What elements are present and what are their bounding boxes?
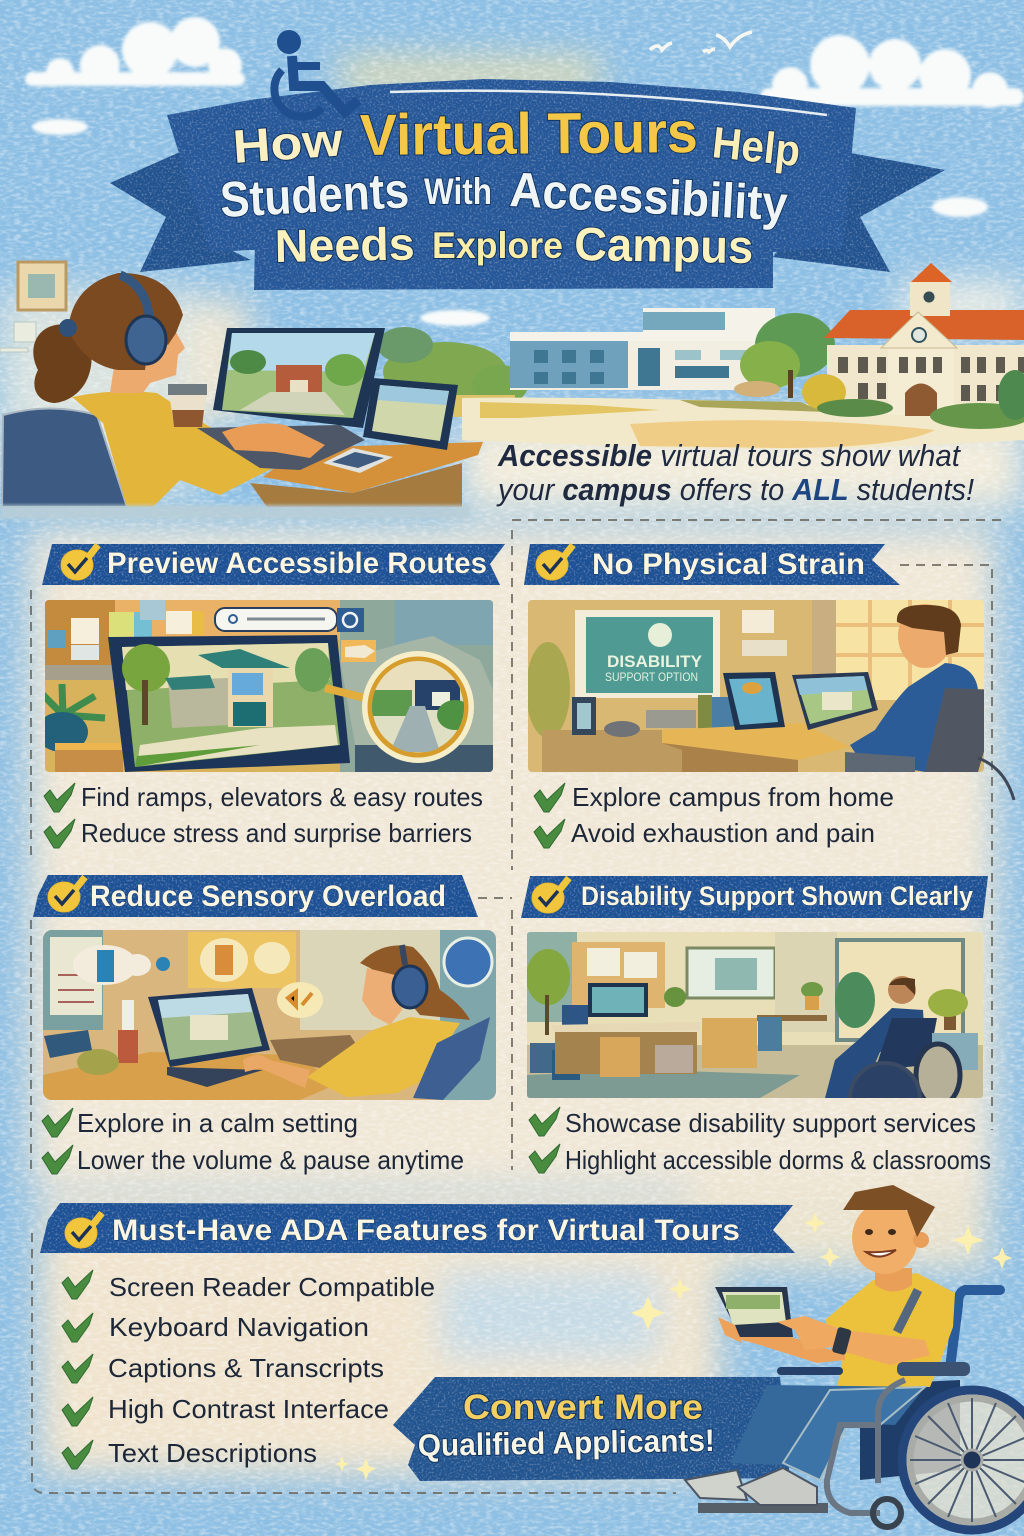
- shoes: [685, 1470, 747, 1500]
- title text: Accessibility: [508, 163, 789, 232]
- feature list: Text Descriptions: [108, 1438, 317, 1468]
- heading: [42, 544, 505, 585]
- title text: Students: [219, 162, 410, 228]
- panel: preview accessible routes: [36, 544, 505, 848]
- title text: How: [231, 112, 345, 173]
- magnifier: [325, 688, 365, 698]
- bullets: Explore in a calm setting: [77, 1108, 358, 1138]
- bullets: [42, 1108, 464, 1175]
- hands: [718, 1317, 742, 1343]
- trees: [755, 313, 835, 377]
- tagline: [496, 438, 974, 507]
- hero illustration: student at desk: [0, 262, 528, 519]
- heading: [524, 544, 900, 585]
- neck and face: [110, 312, 185, 393]
- title text: Needs: [274, 218, 415, 272]
- title text: With: [424, 171, 492, 212]
- wheel: [902, 1390, 1024, 1530]
- hands: [222, 424, 325, 458]
- bullets: Find ramps, elevators & easy routes: [81, 782, 483, 812]
- heading: Reduce Sensory Overload: [90, 880, 446, 913]
- call to action: Convert More: [463, 1388, 703, 1427]
- icon: wheelchair user: [274, 30, 358, 117]
- person in wheelchair: [888, 976, 916, 1004]
- illustration: calm study with headphones: [43, 930, 496, 1100]
- title banner: [110, 30, 945, 290]
- heading: Must-Have ADA Features for Virtual Tours: [112, 1214, 740, 1247]
- title text: Explore: [432, 225, 563, 266]
- person: [850, 663, 978, 772]
- bullets: Showcase disability support services: [565, 1108, 976, 1138]
- illustration: student using laptop at home: [526, 600, 1002, 772]
- call to action: [393, 1377, 790, 1481]
- panel: disability support shown clearly: [521, 876, 991, 1175]
- laptop keyboard: [197, 425, 365, 470]
- chair: [2, 408, 127, 507]
- monitor: [213, 328, 385, 428]
- ground: [462, 398, 1024, 449]
- wheelchair back: [950, 1290, 1000, 1368]
- call to action: Qualified Applicants!: [418, 1423, 715, 1463]
- desk: [263, 442, 483, 493]
- feature list: High Contrast Interface: [108, 1394, 389, 1424]
- watch: [832, 1327, 852, 1355]
- illustration: student using laptop at home: DISABILITY: [607, 652, 703, 671]
- heading: Preview Accessible Routes: [107, 547, 487, 580]
- front desk: [662, 723, 850, 760]
- bullets: [534, 782, 894, 848]
- bullets: Explore campus from home: [572, 782, 894, 812]
- icon: wall frame: [18, 262, 66, 310]
- clock tower building: [824, 263, 1024, 416]
- tablet frame: [108, 635, 350, 772]
- sweater: [307, 1017, 460, 1097]
- footrest: [698, 1503, 828, 1513]
- sparkles: [335, 1212, 1012, 1480]
- tablet: [715, 1287, 793, 1337]
- search bar: [215, 608, 337, 631]
- cup: [168, 386, 207, 427]
- bullets: Lower the volume & pause anytime: [77, 1145, 464, 1175]
- arm: [243, 1055, 310, 1088]
- dashed panel frames: [31, 520, 1005, 1493]
- heading: [33, 875, 478, 917]
- arms: [735, 1330, 845, 1363]
- tagline: your campus offers to ALL students!: [496, 472, 974, 507]
- campus scene: [462, 263, 1024, 449]
- seat: [860, 1380, 960, 1480]
- panel: no physical strain: [524, 544, 1014, 848]
- feature list: Keyboard Navigation: [109, 1312, 369, 1342]
- bullets: [529, 1107, 991, 1175]
- plant and desk: [36, 684, 123, 772]
- band below hero: [0, 505, 470, 519]
- shirt: [825, 1273, 955, 1387]
- tablet: [363, 378, 458, 450]
- title text: Campus: [574, 217, 754, 273]
- ponytail: [33, 324, 92, 403]
- jeans: [730, 1385, 925, 1480]
- heading: Disability Support Shown Clearly: [581, 881, 973, 911]
- sweater: [72, 391, 275, 507]
- bullets: Highlight accessible dorms & classrooms: [565, 1145, 991, 1175]
- title text: Help: [710, 118, 803, 176]
- hair: [68, 273, 183, 370]
- feature list: [62, 1270, 435, 1469]
- headphones: [393, 966, 427, 1008]
- chair: [413, 1017, 490, 1100]
- sign: [575, 610, 720, 698]
- armrests: [897, 1362, 970, 1376]
- feature list: Screen Reader Compatible: [109, 1272, 435, 1302]
- title text: [219, 100, 803, 273]
- illustration: student in wheelchair with tablet: [685, 1185, 1024, 1530]
- illustration: student using laptop at home: SUPPORT OPTION: [605, 670, 698, 684]
- heading: No Physical Strain: [592, 548, 865, 581]
- heading: [40, 1203, 795, 1253]
- back desk: [542, 730, 682, 772]
- panel: reduce sensory overload: [33, 875, 496, 1175]
- phone: [323, 448, 393, 473]
- feature list: Captions & Transcripts: [108, 1353, 384, 1383]
- headphones: [120, 275, 150, 320]
- bullets: Avoid exhaustion and pain: [571, 818, 875, 848]
- face: [362, 968, 402, 1025]
- frame: [827, 1380, 905, 1513]
- hair: [360, 945, 470, 1020]
- bullets: [44, 782, 483, 848]
- tagline: Accessible virtual tours show what: [497, 438, 961, 473]
- illustration: accessible office: [527, 932, 983, 1098]
- bullets: Reduce stress and surprise barriers: [81, 818, 472, 848]
- panel: must-have ADA features: [40, 1203, 795, 1469]
- neck and head: [875, 1268, 912, 1292]
- title text: Virtual Tours: [360, 100, 698, 168]
- modern building: [510, 340, 775, 390]
- heading: [521, 876, 988, 918]
- clouds: [25, 17, 1024, 326]
- laptop: [148, 988, 270, 1067]
- illustration: campus on tablet with magnifier: [36, 600, 493, 772]
- birds: [650, 32, 752, 52]
